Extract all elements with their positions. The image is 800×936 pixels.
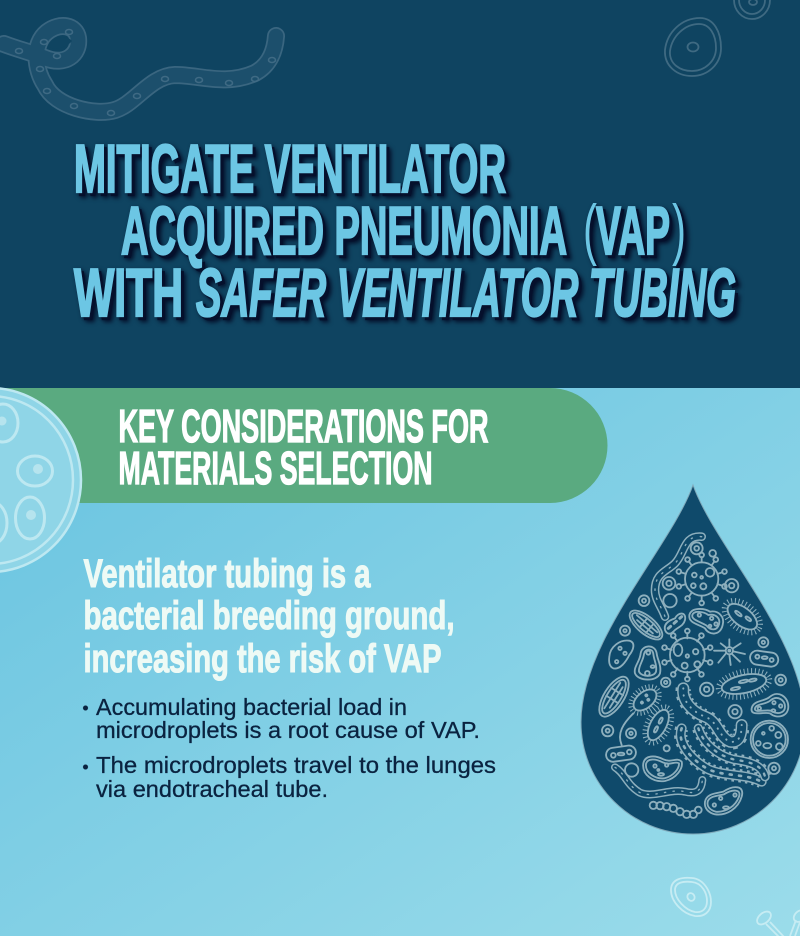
panel: header background <box>0 0 800 388</box>
subheading <box>84 552 454 681</box>
spiky bacilli <box>620 594 772 748</box>
icon: cell outline at top edge <box>734 0 770 19</box>
title: WITH <box>74 255 183 331</box>
virus particles <box>676 553 727 605</box>
striped ovals <box>594 606 667 721</box>
star shaped microbe <box>714 639 745 665</box>
title: ) <box>672 191 686 267</box>
bullet list: microdroplets is a root cause of VAP. <box>96 717 480 743</box>
small round cells <box>602 542 786 774</box>
title <box>74 131 736 331</box>
heading banner <box>0 388 608 503</box>
subheading: Ventilator tubing is a <box>84 552 371 596</box>
bullet list: via endotracheal tube. <box>96 776 328 802</box>
heading banner: MATERIALS SELECTION <box>118 442 432 494</box>
worm bacteria <box>615 537 702 794</box>
subheading: bacterial breeding ground, <box>84 594 454 638</box>
icon: microbe spikes at bottom edge <box>755 908 800 936</box>
icon: cell outline top right <box>665 18 721 76</box>
bullet list: Accumulating bacterial load in <box>96 694 407 720</box>
bullet list: The microdroplets travel to the lunges <box>96 752 496 778</box>
beaded bacilli <box>681 688 765 782</box>
amoeba and peanut shaped cells <box>605 609 788 815</box>
bead chain <box>650 802 702 818</box>
title: ( <box>583 191 597 267</box>
icon: worm bacterium outline <box>4 26 276 116</box>
icon: cell outline lower right <box>671 878 711 916</box>
subheading: increasing the risk of VAP <box>84 637 442 681</box>
icon: petri dish with cells <box>0 388 81 572</box>
title: VAP <box>596 193 670 269</box>
bullet list <box>83 694 496 802</box>
icon: droplet filled with microbes <box>581 485 800 834</box>
panel: lower background <box>0 388 800 936</box>
heading banner: KEY CONSIDERATIONS FOR <box>118 400 488 452</box>
